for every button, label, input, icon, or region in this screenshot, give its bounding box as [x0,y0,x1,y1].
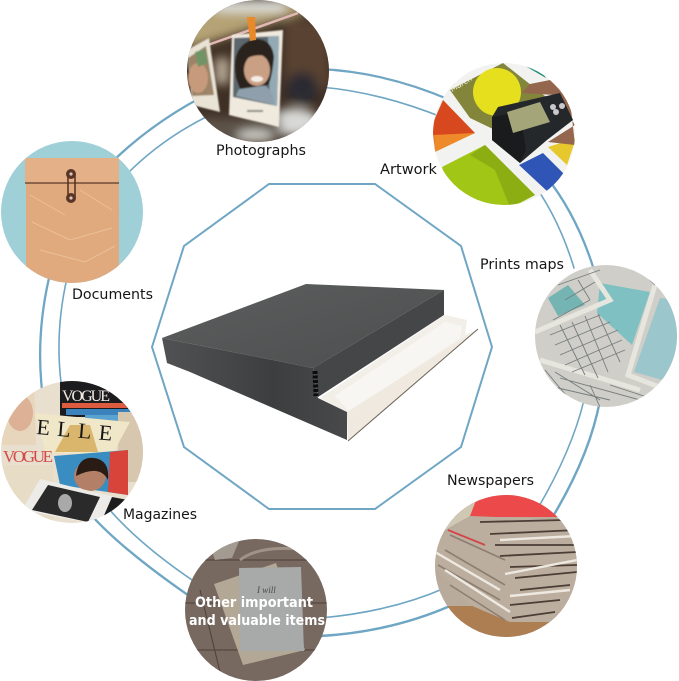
lower left cover [1,465,53,523]
yellow disc [473,68,521,116]
spectrophotometer device [492,93,573,163]
box right side [313,290,444,397]
black and white open magazine [22,479,115,525]
left cover [1,392,36,445]
photo circle: photographs [187,0,329,142]
product: black archival box with white tray [162,284,478,441]
connecting double ring arcs [40,69,600,636]
wooden table [448,606,565,637]
label: Newspapers: Newspapers [447,473,534,489]
label: Photographs: Photographs [216,143,306,159]
blue calendar panel [519,153,567,192]
ELLE masthead: ELLE [36,414,113,446]
folded paper edges [536,269,658,392]
grey note card [239,567,304,651]
handwriting: I will [256,585,276,595]
label: Prints maps: Prints maps [480,257,564,273]
green calendar panel [442,145,535,207]
box lid top [162,284,444,368]
envelope flap [25,158,119,183]
red VOGUE masthead: VOGUE [3,447,53,466]
newspaper stack [435,516,577,622]
metal corner binding [315,371,316,396]
teal calendar panel [525,66,546,78]
main polaroid [229,30,283,127]
hand [522,80,575,145]
ELLE magazine [60,416,130,444]
street map lines [545,270,655,407]
photo circle: documents [1,141,143,284]
label: Magazines: Magazines [123,507,197,523]
label: Documents: Documents [72,287,153,303]
right sea map [634,298,679,385]
VOGUE masthead: VOGUE [62,388,110,405]
olive calendar panel [450,63,550,130]
box front side [162,338,347,440]
beige card [214,563,305,665]
white caption lines [190,596,324,625]
string tie closure [66,169,76,203]
white tray [320,315,478,441]
right magazine [118,412,144,482]
yellow calendar panel [548,138,576,165]
blue and red cover [54,450,128,495]
orange clothes peg [247,17,256,41]
central decagon outline [152,184,492,509]
teal map sheet [597,283,650,345]
red top [454,495,558,517]
photo circle: newspapers [435,495,577,637]
photo circle: artwork [432,63,576,207]
kraft envelope body [26,158,119,284]
red calendar panel [432,100,475,150]
calendar month: March [448,74,474,94]
white caption lines: Other important [195,595,313,611]
top right magazine with pattern [60,381,130,417]
photo circle: prints maps [535,265,679,407]
photo circle: magazines [1,381,144,525]
label: Artwork: Artwork [380,162,438,178]
left polaroid [187,38,220,112]
white caption lines: and valuable items [189,613,325,629]
small teal inset [548,285,585,316]
photo circle: other important and valuable items [185,539,327,681]
